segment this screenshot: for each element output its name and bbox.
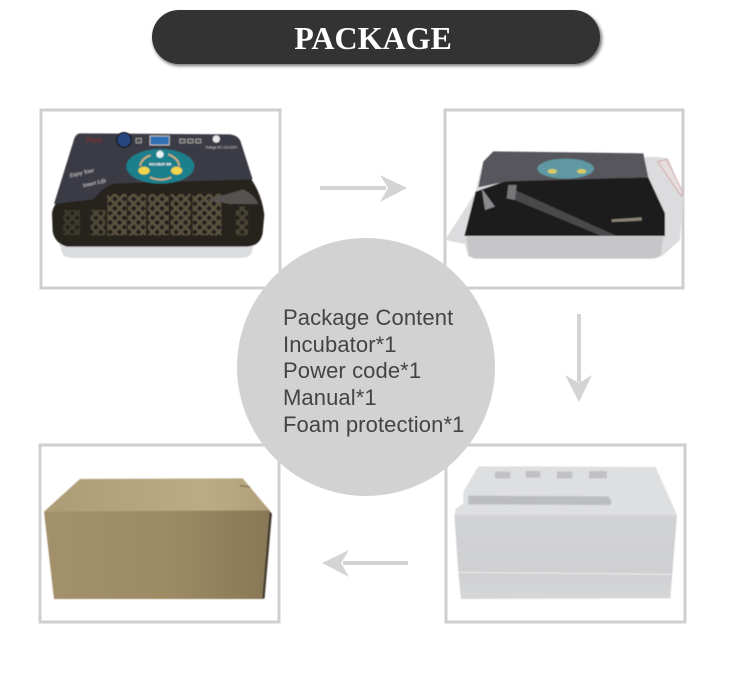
cover reflection (207, 189, 258, 204)
incubator clear cover (52, 177, 264, 247)
dark cover (464, 177, 665, 236)
spec text: Voltage:AC 110-220V (205, 146, 238, 150)
package content list: Manual*1 (283, 385, 377, 410)
red seal strip (658, 159, 683, 197)
slogan line 2: Smart Life (82, 177, 107, 189)
arrow: bottom left (322, 550, 408, 577)
display (150, 136, 169, 145)
package content list: Foam protection*1 (283, 412, 464, 437)
centre circle (237, 238, 495, 496)
panel: cardboard box (40, 445, 279, 622)
package content list: Package Content (283, 305, 453, 330)
foam holes (495, 471, 607, 478)
box flap cut (240, 486, 250, 487)
LED dial (117, 133, 131, 147)
panel: foam protection (446, 445, 685, 622)
wrapped logo (537, 159, 594, 179)
wrinkle highlights (507, 190, 617, 236)
tray (467, 237, 663, 259)
title banner (152, 10, 602, 66)
box front (44, 510, 269, 599)
package content list (283, 305, 464, 437)
slogan: Enjoy Your (68, 168, 96, 179)
title text: PACKAGE (294, 20, 452, 56)
panel: incubator product (41, 110, 280, 288)
foam top (454, 466, 677, 515)
foam slot (468, 496, 612, 505)
box dark edge (262, 511, 272, 599)
package content list: Power code*1 (283, 358, 421, 383)
arrow: top right (320, 175, 407, 202)
power icon (213, 135, 220, 143)
plastic film (445, 157, 683, 257)
brand mark: Pww (87, 135, 103, 144)
egg tray mesh (63, 194, 248, 235)
panel: bagged incubator (445, 110, 683, 288)
foam side (454, 515, 677, 599)
incubator lid (54, 133, 253, 204)
teal logo disc (126, 149, 194, 184)
arrow: right down (565, 314, 592, 402)
teal logo disc: INCUBAT ER (149, 162, 172, 166)
package content list: Incubator*1 (283, 332, 397, 357)
buttons (136, 138, 201, 143)
incubator base (59, 243, 254, 258)
wrapped lid (478, 151, 648, 187)
box top (44, 478, 271, 512)
